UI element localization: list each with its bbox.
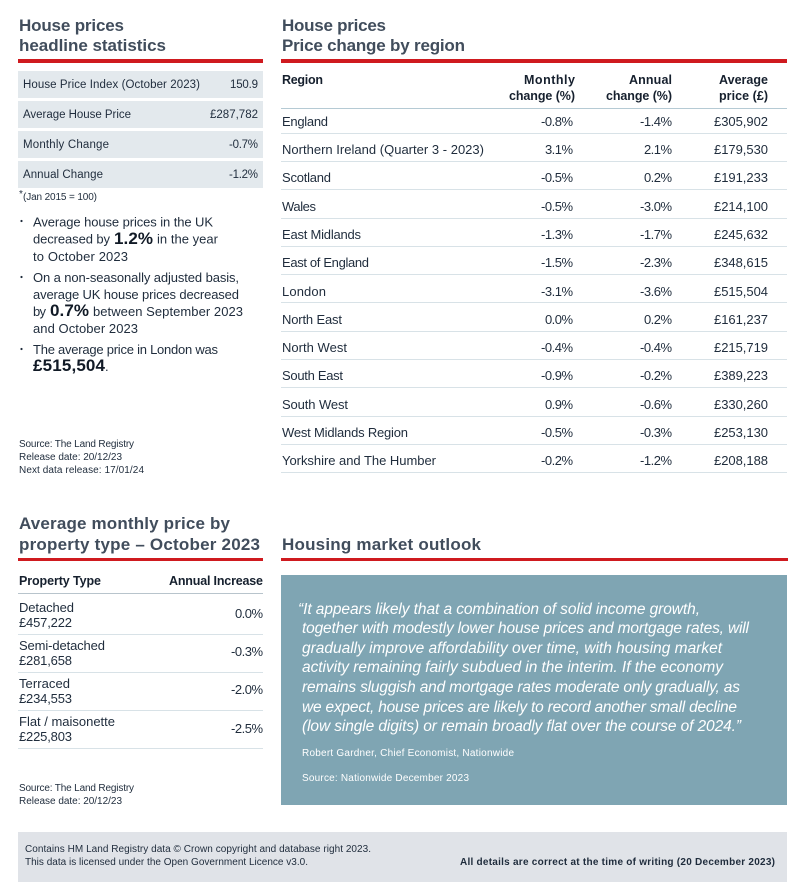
heading: property type: Average monthly price by: [19, 514, 231, 533]
row: North West: -0.4%: [640, 340, 672, 355]
panel: price by property type: [18, 514, 263, 807]
heading: property type: property type – October 2023: [19, 535, 260, 554]
row: Wales: £214,100: [714, 199, 768, 214]
row: Yorkshire and The Humber: -0.2%: [541, 453, 573, 468]
row: North West: -0.4%: [541, 340, 573, 355]
row: West Midlands Region: [281, 425, 787, 445]
row: London: -3.1%: [541, 284, 573, 299]
row: Northern Ireland: £179,530: [714, 142, 768, 157]
row: detached: £457,222: [19, 615, 72, 630]
stat row: house price index: House Price Index (October 2023): [23, 79, 200, 91]
quote panel background: [281, 575, 787, 805]
quote attribution: Robert Gardner, Chief Economist, Nationwide: [302, 748, 514, 759]
bullet: annual decrease: 1.2%: [114, 229, 153, 248]
heading rule: [281, 558, 788, 561]
row: Scotland: £191,233: [714, 170, 768, 185]
bullet: London price: £515,504: [33, 356, 106, 375]
stat row: average house price: Average House Price: [23, 109, 131, 121]
row: England: -1.4%: [640, 114, 672, 129]
bullet: annual decrease: decreased by: [33, 232, 110, 246]
heading: property type: [19, 514, 260, 554]
bullet: annual decrease: in the year: [157, 232, 219, 246]
bullet: annual decrease: to October 2023: [33, 249, 128, 264]
row: London: -3.6%: [640, 284, 672, 299]
row: South East: South East: [282, 368, 343, 383]
row: detached: 0.0%: [235, 606, 263, 621]
row: terraced: Terraced: [19, 676, 70, 691]
row: South West: [281, 397, 787, 417]
row: detached: [18, 600, 263, 635]
row: Scotland: 0.2%: [644, 170, 672, 185]
quote text: remains sluggish and mortgage rates moderate only gradually, as: [302, 679, 740, 696]
row: terraced: -2.0%: [231, 682, 263, 697]
row: East of England: East of England: [282, 255, 369, 270]
quote text: we expect, house prices are likely to record another small decline: [302, 699, 737, 716]
panel: housing market outlook: [281, 535, 788, 805]
stat row: annual change: [18, 161, 263, 188]
header rule: [281, 108, 787, 109]
table header: change (%): [509, 89, 575, 103]
row: England: [281, 114, 787, 134]
source note: Source: The Land Registry: [19, 783, 134, 794]
bullet: annual decrease: Average house prices in the UK: [33, 214, 213, 230]
row: Northern Ireland: Northern Ireland (Quarter 3 - 2023): [282, 142, 484, 157]
source note: [19, 439, 144, 476]
row: Northern Ireland: 2.1%: [644, 142, 672, 157]
table header: Annual Increase: [169, 574, 263, 588]
panel: price change by region: [281, 16, 787, 473]
heading: outlook: Housing market outlook: [282, 535, 482, 554]
licence text: [25, 844, 371, 868]
row: Yorkshire and The Humber: Yorkshire and The Humber: [282, 453, 437, 468]
row: Yorkshire and The Humber: [281, 453, 787, 473]
quote text: activity remaining fairly subdued in the interim. If the economy: [302, 659, 724, 676]
bullet: monthly decrease: 0.7%: [50, 301, 89, 320]
table header: [19, 574, 263, 588]
row: Wales: [281, 199, 787, 219]
row: England: England: [282, 114, 328, 129]
quote text: “It appears likely that a combination of solid income growth,: [298, 601, 700, 618]
row: North West: [281, 340, 787, 360]
bullet: monthly decrease: by: [33, 304, 46, 319]
row: North East: 0.0%: [545, 312, 573, 327]
row: East Midlands: -1.7%: [640, 227, 672, 242]
index footnote: (Jan 2015 = 100): [23, 192, 97, 203]
bullet: monthly decrease: [20, 270, 243, 336]
footer: [18, 832, 787, 882]
row: South West: -0.6%: [640, 397, 672, 412]
source note: [19, 783, 134, 807]
accuracy note: All details are correct at the time of writing (20 December 2023): [460, 857, 775, 868]
table header: price (£): [719, 89, 768, 103]
heading: headline statistics: [19, 16, 166, 55]
stat row: monthly change: [18, 131, 263, 158]
bullet: monthly decrease: average UK house prices decreased: [33, 287, 239, 302]
stat row: annual change: Annual Change: [23, 169, 103, 181]
table header: Region: [282, 73, 323, 87]
stat row: average house price: £287,782: [210, 109, 258, 121]
row: Yorkshire and The Humber: -1.2%: [640, 453, 672, 468]
heading: price change by region: [282, 16, 465, 55]
table header: [282, 73, 768, 103]
table header: Average: [719, 73, 768, 87]
row: semi-detached: Semi-detached: [19, 638, 105, 653]
row: Scotland: -0.5%: [541, 170, 573, 185]
table header: Annual: [629, 73, 672, 87]
row: London: [281, 284, 787, 303]
bullet: London price: [20, 342, 219, 375]
row: East Midlands: -1.3%: [541, 227, 573, 242]
bullet: monthly decrease: On a non-seasonally adjusted basis,: [33, 270, 239, 285]
heading: price change by region: Price change by region: [282, 36, 465, 55]
row: Wales: Wales: [282, 199, 316, 214]
bullet: London price: .: [105, 359, 109, 374]
row: Yorkshire and The Humber: £208,188: [714, 453, 768, 468]
row: semi-detached: £281,658: [19, 653, 72, 668]
licence text: Contains HM Land Registry data © Crown copyright and database right 2023.: [25, 844, 371, 855]
row: semi-detached: [18, 638, 263, 673]
row: semi-detached: -0.3%: [231, 644, 263, 659]
row: North East: 0.2%: [644, 312, 672, 327]
source note: Next data release: 17/01/24: [19, 465, 144, 476]
stat row: house price index: [18, 71, 263, 98]
row: South East: -0.9%: [541, 368, 573, 383]
row: terraced: [18, 676, 263, 711]
stat row: annual change: -1.2%: [229, 169, 258, 181]
source note: Release date: 20/12/23: [19, 452, 122, 463]
row: flat / maisonette: [18, 714, 263, 749]
row: Wales: -0.5%: [541, 199, 573, 214]
row: South East: £389,223: [714, 368, 768, 383]
heading: headline statistics: House prices: [19, 16, 124, 35]
row: North West: £215,719: [714, 340, 768, 355]
licence text: This data is licensed under the Open Government Licence v3.0.: [25, 857, 308, 868]
row: terraced: £234,553: [19, 691, 72, 706]
row: West Midlands Region: £253,130: [714, 425, 768, 440]
row: London: London: [282, 284, 326, 299]
heading rule: [281, 59, 787, 63]
row: East of England: -2.3%: [640, 255, 672, 270]
row: Wales: -3.0%: [640, 199, 672, 214]
bullet: London price: The average price in London was: [33, 342, 218, 357]
table header: Monthly: [524, 73, 575, 87]
quote text: gradually improve affordability over time, with housing market: [302, 640, 723, 657]
stat row: house price index: 150.9: [230, 79, 258, 91]
row: South East: -0.2%: [640, 368, 672, 383]
stat row: monthly change: Monthly Change: [23, 139, 109, 151]
heading rule: [18, 558, 263, 561]
stat row: monthly change: -0.7%: [229, 139, 258, 151]
row: Scotland: Scotland: [282, 170, 331, 185]
row: Northern Ireland: [281, 142, 787, 162]
row: East of England: £348,615: [714, 255, 768, 270]
bullet: monthly decrease: between September 2023: [93, 304, 243, 319]
row: East Midlands: East Midlands: [282, 227, 362, 242]
row: Scotland: [281, 170, 787, 190]
table header: change (%): [606, 89, 672, 103]
row: South West: South West: [282, 397, 348, 412]
panel: headline statistics: [18, 16, 263, 476]
row: East of England: -1.5%: [541, 255, 573, 270]
row: North East: £161,237: [714, 312, 768, 327]
row: England: -0.8%: [541, 114, 573, 129]
row: flat / maisonette: -2.5%: [231, 721, 263, 736]
row: South West: 0.9%: [545, 397, 573, 412]
row: East Midlands: £245,632: [714, 227, 768, 242]
heading rule: [18, 59, 263, 63]
table header: Property Type: [19, 574, 101, 588]
heading: headline statistics: headline statistics: [19, 36, 166, 55]
row: East of England: [281, 255, 787, 275]
row: England: £305,902: [714, 114, 768, 129]
heading: price change by region: House prices: [282, 16, 386, 35]
row: North East: North East: [282, 312, 342, 327]
stat row: average house price: [18, 101, 263, 128]
row: detached: Detached: [19, 600, 74, 615]
source note: Source: The Land Registry: [19, 439, 134, 450]
row: Northern Ireland: 3.1%: [545, 142, 573, 157]
quote text: (low single digits) or remain broadly flat over the course of 2024.”: [302, 718, 742, 735]
row: West Midlands Region: -0.3%: [640, 425, 672, 440]
quote source: Source: Nationwide December 2023: [302, 773, 469, 784]
row: East Midlands: [281, 227, 787, 247]
quote text: [298, 601, 750, 735]
row: London: £515,504: [714, 284, 768, 299]
quote text: together with modestly lower house prices and mortgage rates, will: [302, 620, 750, 637]
source note: Release date: 20/12/23: [19, 796, 122, 807]
row: North East: [281, 312, 787, 332]
header rule: [18, 593, 263, 594]
row: West Midlands Region: West Midlands Region: [282, 425, 408, 440]
bullet: annual decrease: [20, 214, 219, 264]
row: flat / maisonette: Flat / maisonette: [19, 714, 115, 729]
row: North West: North West: [282, 340, 347, 355]
row: flat / maisonette: £225,803: [19, 729, 72, 744]
row: West Midlands Region: -0.5%: [541, 425, 573, 440]
row: South West: £330,260: [714, 397, 768, 412]
row: South East: [281, 368, 787, 388]
index footnote: *: [19, 189, 23, 200]
bullet: monthly decrease: and October 2023: [33, 321, 138, 336]
